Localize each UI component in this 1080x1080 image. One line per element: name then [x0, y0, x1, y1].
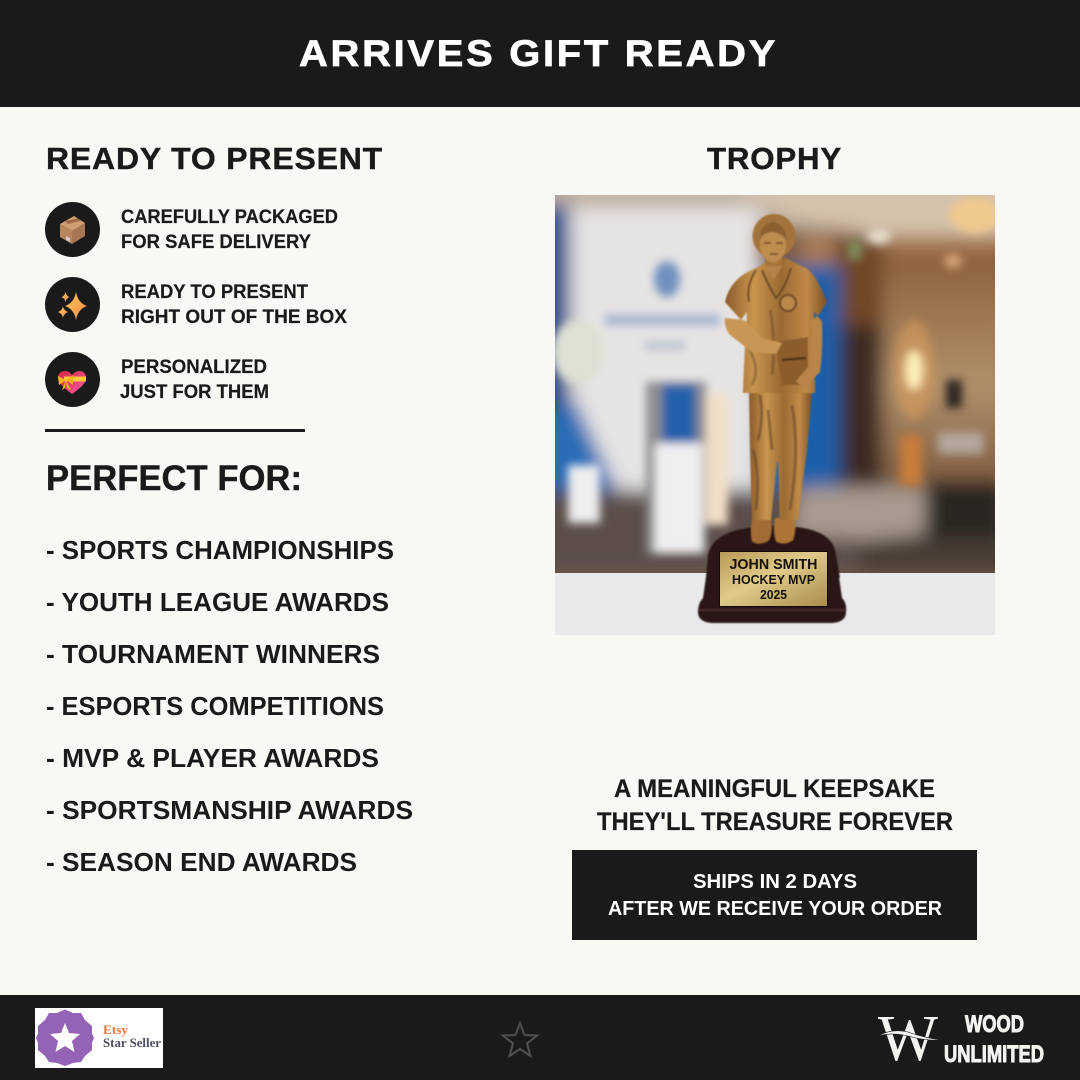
white table [555, 573, 995, 635]
shoes [751, 517, 772, 544]
list: award occasions: - SPORTS CHAMPIONSHIPS [46, 535, 394, 565]
neck [764, 258, 782, 266]
shipping callout [572, 850, 977, 940]
scrub top [725, 258, 827, 393]
nameplate: 2025 [760, 588, 787, 602]
nameplate [719, 551, 828, 607]
logo: wood unlimited: WOOD [965, 1011, 1024, 1038]
clipboard [775, 337, 808, 385]
trophy [698, 214, 846, 623]
photo: trophy on stage backdrop [555, 195, 995, 635]
item: ready to present: READY TO PRESENT [121, 281, 308, 303]
bronze figure [725, 214, 827, 544]
logo: wood unlimited: UNLIMITED [944, 1041, 1044, 1068]
nameplate: HOCKEY MVP [732, 573, 815, 587]
item: carefully packaged: CAREFULLY PACKAGED [121, 206, 338, 228]
keepsake message: A MEANINGFUL KEEPSAKE [614, 775, 935, 803]
icon: outline star [503, 1023, 537, 1056]
badge: etsy star seller [35, 1008, 163, 1068]
item: personalized [45, 352, 269, 407]
heading: ready to present: READY TO PRESENT [46, 141, 383, 176]
list: award occasions: - SPORTSMANSHIP AWARDS [46, 795, 413, 825]
item: personalized: JUST FOR THEM [120, 381, 269, 403]
trophy base [698, 526, 846, 623]
footer band [0, 995, 1080, 1080]
item: carefully packaged: FOR SAFE DELIVERY [121, 231, 311, 253]
nameplate: JOHN SMITH [730, 556, 818, 573]
icon: package box [60, 216, 85, 244]
logo: wood unlimited: W [878, 1002, 939, 1075]
pants [749, 390, 812, 520]
list: award occasions: - MVP & PLAYER AWARDS [46, 743, 379, 773]
shipping callout: SHIPS IN 2 DAYS [693, 871, 857, 893]
title: ARRIVES GIFT READY [299, 33, 778, 74]
list: award occasions: - ESPORTS COMPETITIONS [46, 691, 384, 721]
item: ready to present [45, 277, 347, 332]
logo: wood unlimited [878, 1002, 1044, 1075]
badge: etsy star seller: Star Seller [103, 1036, 161, 1050]
icon: gift heart [58, 371, 86, 394]
keepsake message [597, 775, 953, 836]
list: award occasions [46, 535, 413, 877]
panel: perfect for [46, 459, 413, 877]
keepsake message: THEY'LL TREASURE FOREVER [597, 808, 953, 836]
badge: etsy star seller: Etsy [103, 1023, 129, 1037]
blurred event room background [555, 195, 995, 573]
list: award occasions: - YOUTH LEAGUE AWARDS [46, 587, 389, 617]
item: personalized: PERSONALIZED [121, 356, 267, 378]
icon: sparkles [58, 292, 87, 320]
header band [0, 0, 1080, 107]
shipping callout: AFTER WE RECEIVE YOUR ORDER [608, 898, 943, 920]
panel: ready to present [45, 141, 383, 407]
item: ready to present: RIGHT OUT OF THE BOX [121, 306, 347, 328]
heading: trophy: TROPHY [707, 141, 842, 176]
arms [725, 318, 782, 354]
hair and face [752, 214, 796, 258]
list: award occasions: - TOURNAMENT WINNERS [46, 639, 380, 669]
item: carefully packaged [45, 202, 338, 257]
heading: perfect for: PERFECT FOR: [46, 459, 302, 498]
list: award occasions: - SEASON END AWARDS [46, 847, 357, 877]
